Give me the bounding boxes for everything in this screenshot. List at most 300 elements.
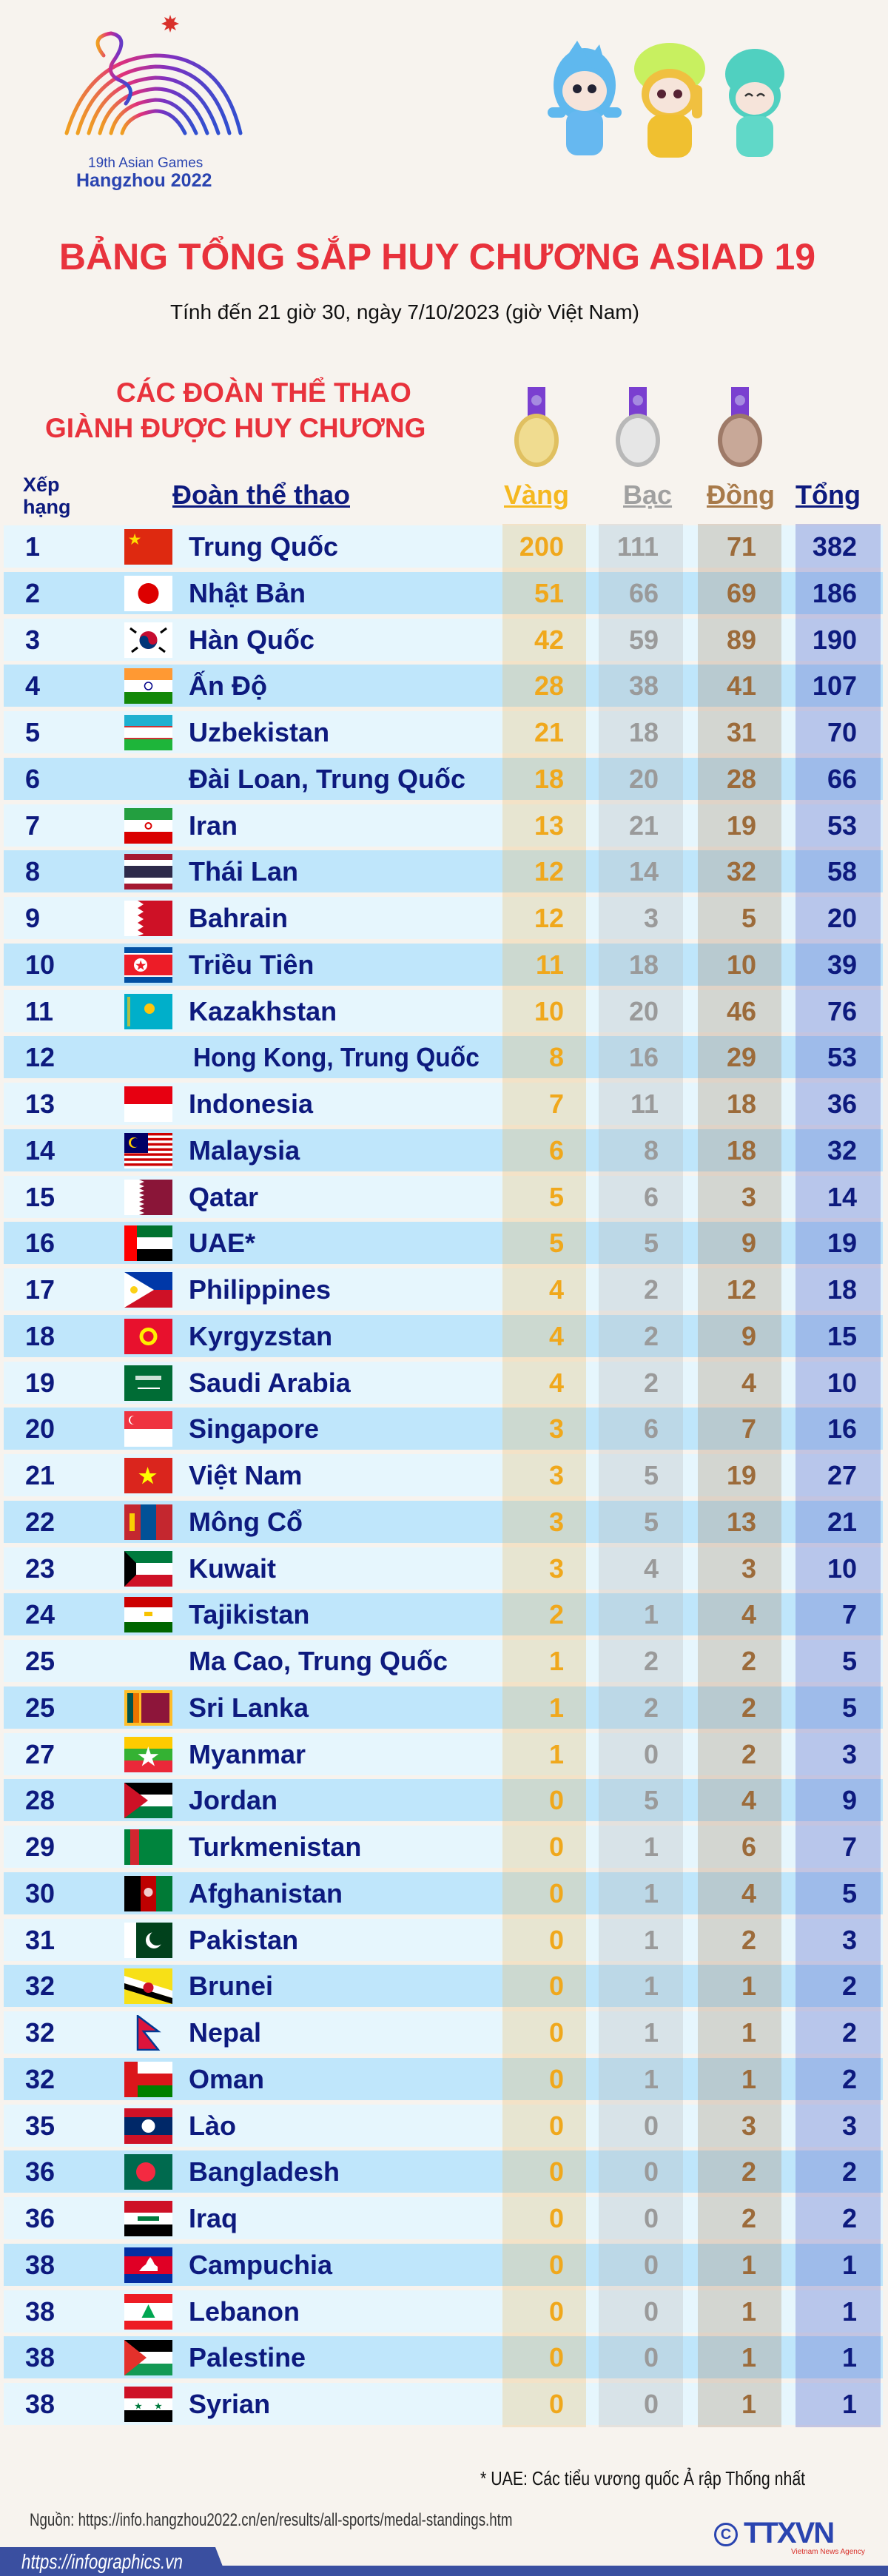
row: Nhật Bản [4, 572, 883, 614]
row: Syrian: 1 [842, 2389, 857, 2419]
row: Afghanistan: 5 [842, 1878, 857, 1909]
row: Tajikistan [4, 1593, 883, 1635]
row: Đài Loan: 20 [629, 764, 659, 794]
row: Kyrgyzstan: 4 [549, 1321, 564, 1351]
row: Ấn Độ: 38 [629, 670, 659, 701]
row: Sri Lanka: Sri Lanka [189, 1692, 309, 1723]
row: Iraq: 0 [644, 2203, 659, 2233]
row: Trung Quốc [4, 525, 883, 568]
row: Indonesia: 7 [549, 1089, 564, 1119]
row: Afghanistan [4, 1872, 883, 1914]
row: Trung Quốc: 1 [25, 531, 40, 562]
row: Việt Nam: Việt Nam [189, 1460, 302, 1490]
row: Tajikistan: 1 [644, 1599, 659, 1630]
row: Thái Lan: 12 [534, 856, 564, 887]
row: Bahrain: 3 [644, 903, 659, 933]
row: Syrian: 0 [549, 2389, 564, 2419]
row: Bahrain: 12 [534, 903, 564, 933]
row: Qatar [4, 1176, 883, 1218]
row: Turkmenistan: 7 [842, 1832, 857, 1862]
row: Mông Cổ: 5 [644, 1507, 659, 1537]
row: Mông Cổ: 3 [549, 1507, 564, 1537]
logo: 19th Asian Games Hangzhou 2022: Hangzhou 2022 [76, 170, 212, 191]
footnote: * UAE: Các tiểu vương quốc Ả rập Thống nhất [480, 2467, 805, 2489]
row: Oman: Oman [189, 2064, 264, 2094]
row: Ma Cao: 2 [741, 1646, 756, 1676]
row: Iraq [4, 2197, 883, 2239]
row: Hàn Quốc: 59 [629, 625, 659, 655]
row: Palestine [4, 2336, 883, 2378]
row: Myanmar: 2 [741, 1739, 756, 1769]
row: Kazakhstan: 11 [25, 996, 53, 1026]
row: Bahrain [4, 897, 883, 939]
logo: 19th Asian Games Hangzhou 2022: 19th Asian Games [88, 155, 203, 171]
row: Kyrgyzstan [4, 1315, 883, 1357]
row: Lebanon: Lebanon [189, 2296, 300, 2327]
row: Afghanistan: Afghanistan [189, 1878, 343, 1909]
row: UAE [4, 1222, 883, 1264]
row: Tajikistan: 4 [741, 1599, 756, 1630]
row: Malaysia: 6 [549, 1135, 564, 1166]
row: Nhật Bản: 51 [534, 578, 564, 608]
row: Iran: 21 [629, 810, 659, 841]
column headers: hạng [23, 496, 71, 518]
row: Việt Nam: 3 [549, 1460, 564, 1490]
row: Indonesia: 36 [827, 1089, 857, 1119]
row: Pakistan: 31 [25, 1925, 55, 1955]
row: Sri Lanka: 2 [741, 1692, 756, 1723]
row: Iran: Iran [189, 810, 238, 841]
row: Hàn Quốc: 89 [727, 625, 756, 655]
row: Uzbekistan: 21 [534, 717, 564, 747]
row: Campuchia: Campuchia [189, 2250, 332, 2280]
row: Lào: 35 [25, 2111, 55, 2141]
icon: silver medal [616, 387, 660, 467]
row: Nhật Bản: 2 [25, 578, 40, 608]
row: Đài Loan: 18 [534, 764, 564, 794]
row: Indonesia [4, 1083, 883, 1125]
row: Singapore: Singapore [189, 1413, 319, 1444]
column band: bronze [698, 524, 781, 2427]
row: Turkmenistan: 1 [644, 1832, 659, 1862]
row: Bangladesh: 2 [741, 2156, 756, 2187]
column headers: Đoàn thể thao [172, 480, 350, 510]
row: Singapore: 16 [827, 1413, 857, 1444]
row: Bangladesh: 2 [842, 2156, 857, 2187]
row: Uzbekistan: 70 [827, 717, 857, 747]
row: Uzbekistan [4, 711, 883, 753]
row: Palestine: 38 [25, 2342, 55, 2372]
logo: 19th Asian Games Hangzhou 2022 [65, 15, 243, 191]
row: Sri Lanka: 5 [842, 1692, 857, 1723]
row: Triều Tiên: 10 [25, 949, 55, 980]
subtitle: Tính đến 21 giờ 30, ngày 7/10/2023 (giờ Việt Nam) [170, 300, 639, 323]
column band: total [796, 524, 881, 2427]
row: Saudi Arabia: Saudi Arabia [189, 1368, 351, 1398]
row: Singapore: 20 [25, 1413, 55, 1444]
row: Myanmar: Myanmar [189, 1739, 306, 1769]
row: UAE: UAE* [189, 1228, 255, 1258]
row: Afghanistan: 4 [741, 1878, 756, 1909]
row: Pakistan: 2 [741, 1925, 756, 1955]
row: Hong Kong: 12 [25, 1042, 55, 1072]
row: UAE: 19 [827, 1228, 857, 1258]
footer bar [0, 2547, 888, 2576]
row: Lebanon: 1 [842, 2296, 857, 2327]
row: Việt Nam: 5 [644, 1460, 659, 1490]
row: Oman: 0 [549, 2064, 564, 2094]
row: Kuwait [4, 1547, 883, 1590]
row: Kuwait: 10 [827, 1553, 857, 1584]
row: Hàn Quốc: 3 [25, 625, 40, 655]
row: Malaysia: 18 [727, 1135, 756, 1166]
row: Afghanistan: 0 [549, 1878, 564, 1909]
row: Campuchia: 0 [549, 2250, 564, 2280]
logo: TTXVN: TTXVN [744, 2517, 833, 2549]
row: Ma Cao: 5 [842, 1646, 857, 1676]
row: Lào [4, 2105, 883, 2147]
row: Kazakhstan: 76 [827, 996, 857, 1026]
source: Nguồn: https://info.hangzhou2022.cn/en/results/all-sports/medal-standings.htm [30, 2510, 512, 2530]
row: Saudi Arabia [4, 1362, 883, 1404]
row: Kazakhstan: 20 [629, 996, 659, 1026]
row: Pakistan: 0 [549, 1925, 564, 1955]
row: Ma Cao: 2 [644, 1646, 659, 1676]
row: Trung Quốc: 111 [617, 531, 659, 562]
row: Iraq: 0 [549, 2203, 564, 2233]
row: Myanmar: 1 [549, 1739, 564, 1769]
row: Ma Cao: 25 [25, 1646, 55, 1676]
row: Iraq: Iraq [189, 2203, 238, 2233]
row: Myanmar: ★ [138, 1743, 159, 1770]
row: Triều Tiên: 11 [536, 949, 564, 980]
row: Đài Loan: 28 [727, 764, 756, 794]
row: Oman: 32 [25, 2064, 55, 2094]
row: Đài Loan: 6 [25, 764, 40, 794]
row: Hong Kong: 53 [827, 1042, 857, 1072]
row: Trung Quốc: 200 [519, 531, 564, 562]
row: Palestine: 0 [644, 2342, 659, 2372]
column band: gold [502, 524, 586, 2427]
row: Việt Nam [4, 1454, 883, 1496]
row: Lebanon: 38 [25, 2296, 55, 2327]
row: Bahrain: 9 [25, 903, 40, 933]
row: Lebanon: 0 [644, 2296, 659, 2327]
row: Jordan [4, 1779, 883, 1821]
row: Saudi Arabia: 4 [549, 1368, 564, 1398]
row: Triều Tiên: Triều Tiên [189, 949, 314, 980]
row: Lào: 3 [842, 2111, 857, 2141]
row: Thái Lan: 14 [629, 856, 659, 887]
column headers: Xếp [23, 474, 60, 496]
row: Ấn Độ: 4 [25, 670, 40, 701]
row: Bahrain: Bahrain [189, 903, 288, 933]
row: Turkmenistan: 29 [25, 1832, 55, 1862]
row: Ấn Độ: 41 [727, 670, 756, 701]
row: Qatar: 14 [827, 1182, 857, 1212]
row: Syrian: 38 [25, 2389, 55, 2419]
row: Myanmar [4, 1733, 883, 1775]
row: Syrian: Syrian [189, 2389, 270, 2419]
column headers: Bạc [623, 480, 672, 510]
row: Qatar: 3 [741, 1182, 756, 1212]
row: Malaysia: 14 [25, 1135, 55, 1166]
row: Triều Tiên: 10 [727, 949, 756, 980]
row: Indonesia: 13 [25, 1089, 55, 1119]
row: Jordan: 28 [25, 1785, 55, 1815]
row: Bahrain: 20 [827, 903, 857, 933]
row: Brunei: 2 [842, 1971, 857, 2001]
row: UAE: 5 [644, 1228, 659, 1258]
row: Iran: 13 [534, 810, 564, 841]
row: Ma Cao: Ma Cao, Trung Quốc [189, 1646, 448, 1676]
row: Philippines: 4 [549, 1274, 564, 1305]
row: Tajikistan: 24 [25, 1599, 55, 1630]
row: Iran [4, 804, 883, 847]
row: Turkmenistan: Turkmenistan [189, 1832, 361, 1862]
row: Kyrgyzstan: 2 [644, 1321, 659, 1351]
column headers: Vàng [504, 480, 569, 510]
row: Lebanon [4, 2290, 883, 2333]
row: Singapore: 3 [549, 1413, 564, 1444]
row: Đài Loan: 66 [827, 764, 857, 794]
row: Kuwait: 23 [25, 1553, 55, 1584]
row: Oman [4, 2058, 883, 2100]
row: Kyrgyzstan: 15 [827, 1321, 857, 1351]
row: Triều Tiên: ★ [135, 960, 147, 972]
row: Brunei [4, 1965, 883, 2007]
row: Ma Cao [4, 1640, 883, 1682]
row: Bahrain: 5 [741, 903, 756, 933]
row: Lào: 0 [644, 2111, 659, 2141]
row: Bangladesh [4, 2150, 883, 2193]
row: Mông Cổ: 21 [827, 1507, 857, 1537]
row: Iraq: 2 [741, 2203, 756, 2233]
row: Brunei: 0 [549, 1971, 564, 2001]
row: Palestine: 0 [549, 2342, 564, 2372]
row: Thái Lan: Thái Lan [189, 856, 298, 887]
row: Việt Nam: 19 [727, 1460, 756, 1490]
row: Sri Lanka [4, 1686, 883, 1729]
row: Afghanistan: 1 [644, 1878, 659, 1909]
row: Turkmenistan: 6 [741, 1832, 756, 1862]
row: Philippines: 12 [727, 1274, 756, 1305]
row: Uzbekistan: 5 [25, 717, 40, 747]
row: Trung Quốc: ★ [129, 532, 141, 547]
row: Malaysia: Malaysia [189, 1135, 300, 1166]
row: Thái Lan: 32 [727, 856, 756, 887]
row: Hàn Quốc: 42 [534, 625, 564, 655]
row: Palestine: Palestine [189, 2342, 306, 2372]
row: Campuchia: 1 [842, 2250, 857, 2280]
row: Singapore: 6 [644, 1413, 659, 1444]
row: Ấn Độ: Ấn Độ [189, 670, 267, 701]
row: Hong Kong: 16 [629, 1042, 659, 1072]
row: Thái Lan [4, 850, 883, 892]
row: Jordan: 9 [842, 1785, 857, 1815]
row: Lào: 0 [549, 2111, 564, 2141]
column headers: Đồng [707, 480, 775, 510]
row: Afghanistan: 30 [25, 1878, 55, 1909]
row: Qatar: 6 [644, 1182, 659, 1212]
row: Philippines: 17 [25, 1274, 55, 1305]
row: Jordan: Jordan [189, 1785, 278, 1815]
row: Syrian: ★ [135, 2402, 142, 2411]
row: Kyrgyzstan: 18 [25, 1321, 55, 1351]
row: Bangladesh: 0 [644, 2156, 659, 2187]
row: Sri Lanka: 2 [644, 1692, 659, 1723]
row: Iran: 7 [25, 810, 40, 841]
logo: TTXVN [714, 2517, 865, 2556]
row: Jordan: 4 [741, 1785, 756, 1815]
row: Oman: 1 [644, 2064, 659, 2094]
row: Lebanon: 0 [549, 2296, 564, 2327]
row: Philippines [4, 1268, 883, 1311]
row: Nepal: 1 [741, 2017, 756, 2048]
row: Iraq: 2 [842, 2203, 857, 2233]
row: Syrian: 0 [644, 2389, 659, 2419]
row: Thái Lan: 58 [827, 856, 857, 887]
row: Đài Loan [4, 758, 883, 800]
row: Triều Tiên: 18 [629, 949, 659, 980]
row: Singapore [4, 1408, 883, 1450]
row: Saudi Arabia: 19 [25, 1368, 55, 1398]
row: Pakistan: 3 [842, 1925, 857, 1955]
row: Turkmenistan [4, 1826, 883, 1868]
row: Mông Cổ: 22 [25, 1507, 55, 1537]
row: Lebanon: 1 [741, 2296, 756, 2327]
row: Iran: 53 [827, 810, 857, 841]
row: Hong Kong: Hong Kong, Trung Quốc [193, 1042, 480, 1072]
row: Myanmar: 0 [644, 1739, 659, 1769]
row: Philippines: 18 [827, 1274, 857, 1305]
row: Thái Lan: 8 [25, 856, 40, 887]
row: Iran: 19 [727, 810, 756, 841]
row: Qatar: Qatar [189, 1182, 258, 1212]
row: Ấn Độ: 107 [813, 670, 857, 701]
row: UAE: 9 [741, 1228, 756, 1258]
row: Nepal: Nepal [189, 2017, 261, 2048]
row: Uzbekistan: 31 [727, 717, 756, 747]
row: Sri Lanka: 25 [25, 1692, 55, 1723]
row: Mông Cổ: Mông Cổ [189, 1507, 303, 1537]
column headers: Tổng [796, 480, 861, 510]
row: Syrian: ★ [155, 2402, 162, 2411]
row: Indonesia: Indonesia [189, 1089, 313, 1119]
section heading: CÁC ĐOÀN THỂ THAO [116, 377, 411, 408]
row: Kazakhstan: 10 [534, 996, 564, 1026]
icon: bronze medal [718, 387, 762, 467]
row: Nhật Bản: 186 [813, 578, 857, 608]
section heading [45, 377, 426, 443]
row: Triều Tiên: 39 [827, 949, 857, 980]
row: Sri Lanka: 1 [549, 1692, 564, 1723]
row: Nhật Bản: 69 [727, 578, 756, 608]
row: Kuwait: 3 [549, 1553, 564, 1584]
row: Nepal: 32 [25, 2017, 55, 2048]
column band: silver [599, 524, 683, 2427]
row: Ấn Độ: 28 [534, 670, 564, 701]
row: Brunei: Brunei [189, 1971, 273, 2001]
row: Campuchia: 38 [25, 2250, 55, 2280]
footer url: https://infographics.vn [21, 2550, 183, 2573]
row: Hàn Quốc: Hàn Quốc [189, 625, 314, 655]
row: Kyrgyzstan: Kyrgyzstan [189, 1321, 332, 1351]
row: Syrian [4, 2383, 883, 2425]
row: Nhật Bản: 66 [629, 578, 659, 608]
row: Kazakhstan: Kazakhstan [189, 996, 337, 1026]
row: Hàn Quốc [4, 619, 883, 661]
row: Nepal: 1 [644, 2017, 659, 2048]
row: Bangladesh: Bangladesh [189, 2156, 340, 2187]
row: Tajikistan: 7 [842, 1599, 857, 1630]
row: Việt Nam: 27 [827, 1460, 857, 1490]
row: Kyrgyzstan: 9 [741, 1321, 756, 1351]
row: Oman: 2 [842, 2064, 857, 2094]
row: Philippines: Philippines [189, 1274, 331, 1305]
row: Nhật Bản: Nhật Bản [189, 578, 306, 608]
row: Palestine: 1 [842, 2342, 857, 2372]
row: Campuchia: 0 [644, 2250, 659, 2280]
row: Bangladesh: 36 [25, 2156, 55, 2187]
row: Kuwait: Kuwait [189, 1553, 276, 1584]
row: Nepal [4, 2011, 883, 2054]
row: Myanmar: 27 [25, 1739, 55, 1769]
row: Saudi Arabia: 4 [741, 1368, 756, 1398]
row: Oman: 1 [741, 2064, 756, 2094]
row: Pakistan [4, 1919, 883, 1961]
row: UAE: 5 [549, 1228, 564, 1258]
row: Brunei: 32 [25, 1971, 55, 2001]
row: Lào: 3 [741, 2111, 756, 2141]
row: UAE: 16 [25, 1228, 55, 1258]
row: Mông Cổ [4, 1501, 883, 1543]
row: Uzbekistan: Uzbekistan [189, 717, 329, 747]
row: Bangladesh: 0 [549, 2156, 564, 2187]
icon: gold medal [514, 387, 559, 467]
row: Việt Nam: 21 [25, 1460, 55, 1490]
row: Ma Cao: 1 [549, 1646, 564, 1676]
row: Campuchia [4, 2244, 883, 2286]
mascots [548, 41, 784, 158]
row: Qatar: 5 [549, 1182, 564, 1212]
row: Brunei: 1 [644, 1971, 659, 2001]
logo: TTXVN: C [721, 2526, 731, 2543]
row: Jordan: 0 [549, 1785, 564, 1815]
row: Saudi Arabia: 2 [644, 1368, 659, 1398]
row: Turkmenistan: 0 [549, 1832, 564, 1862]
medals icons [514, 387, 762, 467]
row: Hong Kong: 8 [549, 1042, 564, 1072]
logo: TTXVN: Vietnam News Agency [791, 2548, 865, 2556]
row: Hong Kong [4, 1036, 883, 1078]
row: Pakistan: Pakistan [189, 1925, 298, 1955]
row: Malaysia: 32 [827, 1135, 857, 1166]
row: Brunei: 1 [741, 1971, 756, 2001]
row: Palestine: 1 [741, 2342, 756, 2372]
row: Philippines: 2 [644, 1274, 659, 1305]
row: Hong Kong: 29 [727, 1042, 756, 1072]
row: Hàn Quốc: 190 [813, 625, 857, 655]
row: Uzbekistan: 18 [629, 717, 659, 747]
row: Myanmar: 3 [842, 1739, 857, 1769]
row: Mông Cổ: 13 [727, 1507, 756, 1537]
row: Trung Quốc: 382 [813, 531, 857, 562]
row: Tajikistan: 2 [549, 1599, 564, 1630]
row: Pakistan: 1 [644, 1925, 659, 1955]
row: Triều Tiên [4, 944, 883, 986]
row: Nepal: 0 [549, 2017, 564, 2048]
